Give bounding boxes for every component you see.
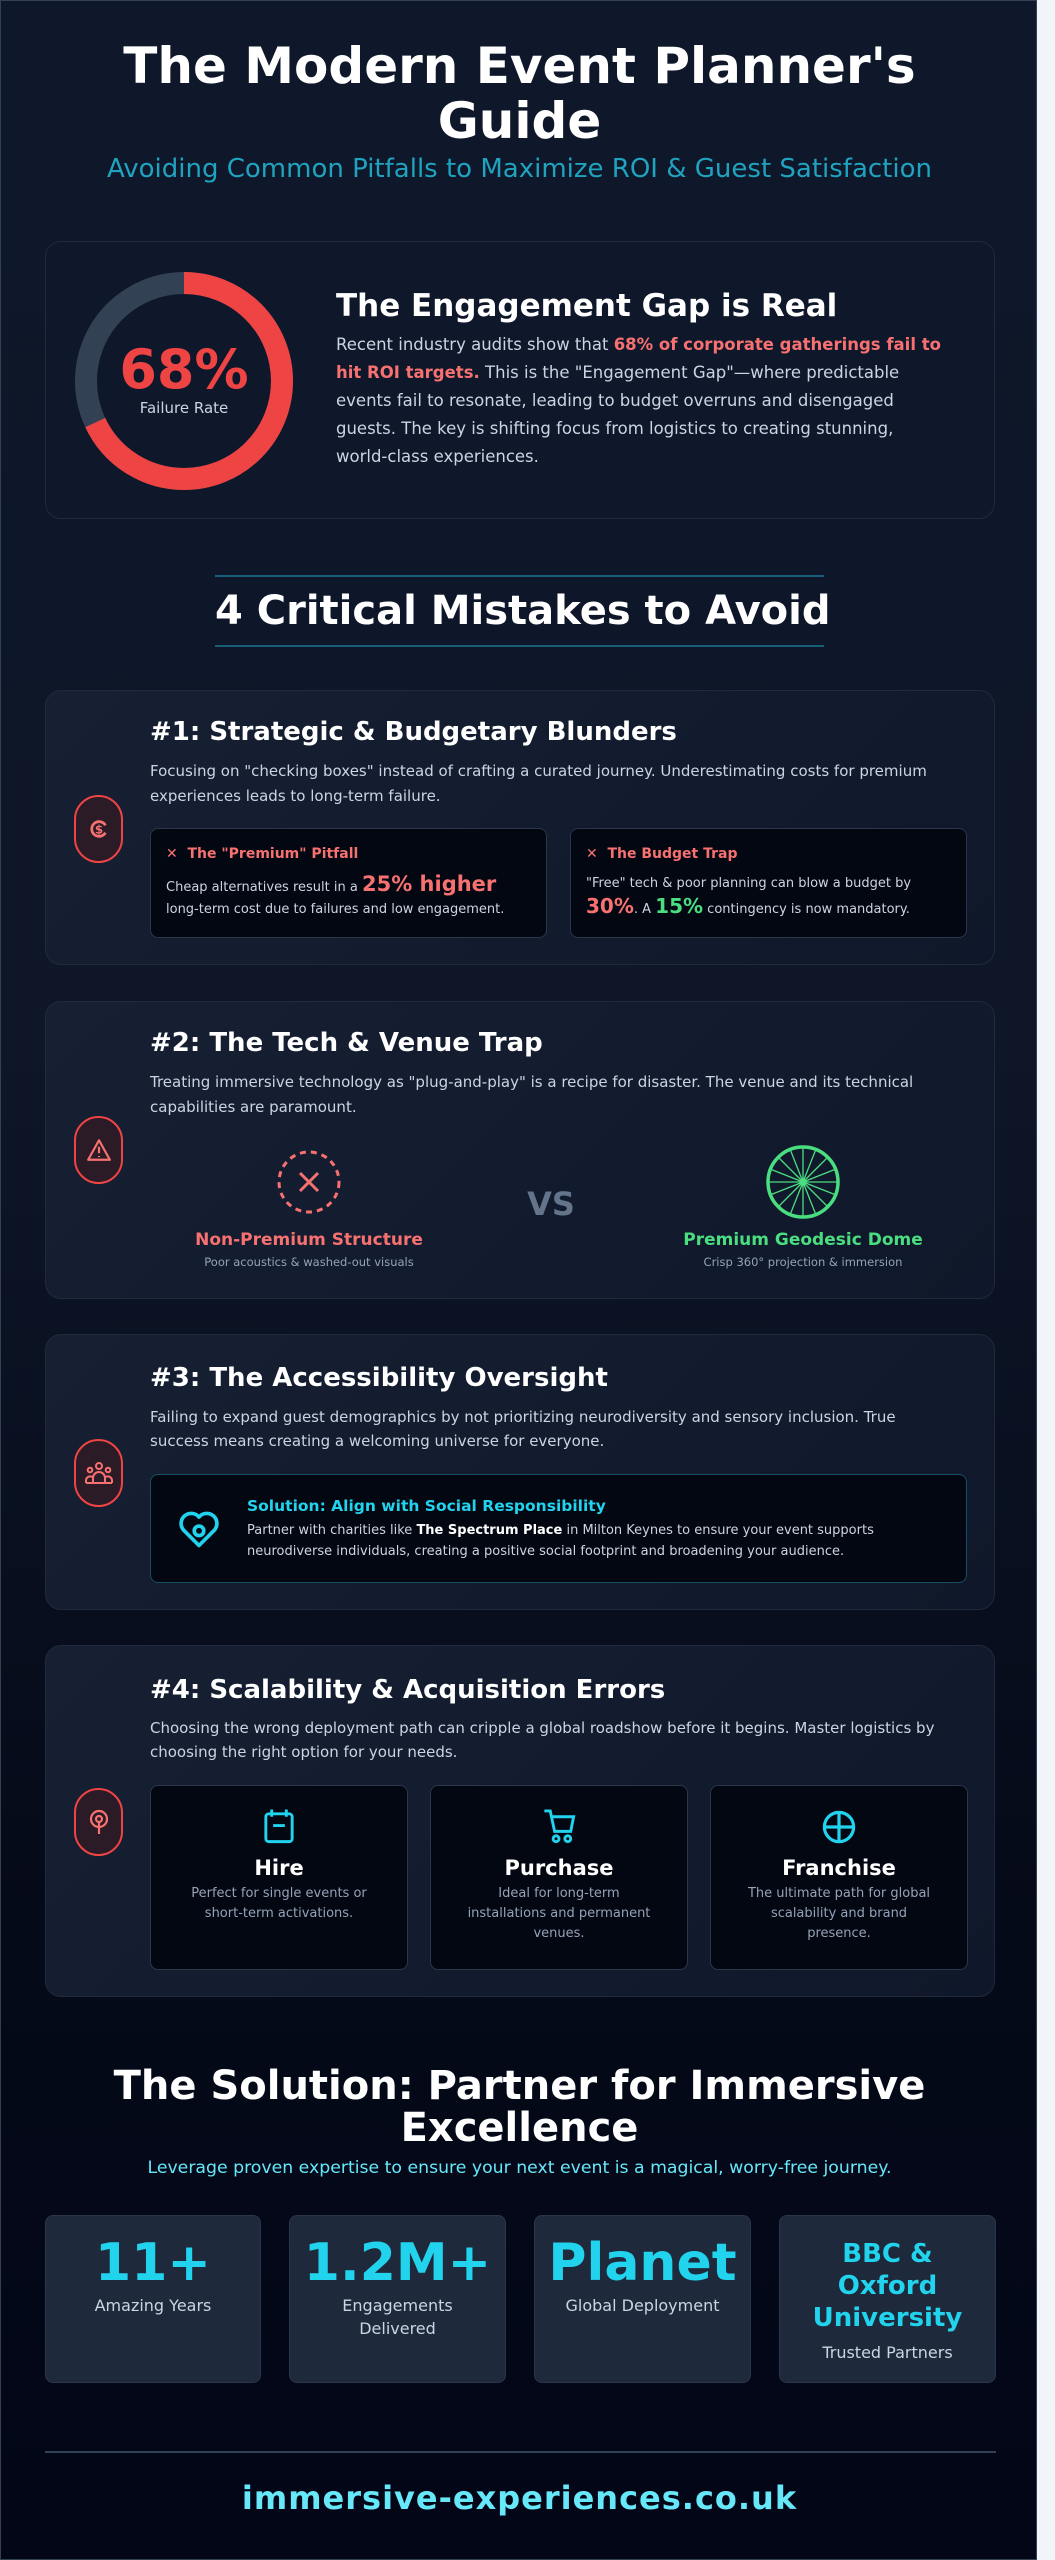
icon: geodesic dome: Premium Geodesic Dome (683, 1230, 923, 1250)
stat: partners: University (813, 2303, 962, 2333)
icon: non-premium structure: Non-Premium Structure (195, 1230, 423, 1250)
option: franchise (710, 1785, 968, 1970)
title: Guide (438, 92, 601, 150)
stat: partners: Oxford (838, 2271, 937, 2301)
callout: premium pitfall (150, 828, 547, 938)
callout: solution: Solution: Align with Social Responsibility (247, 1497, 606, 1515)
callout: budget trap (570, 828, 967, 938)
stat: planet: Planet (548, 2233, 737, 2293)
icon: non-premium structure (195, 1150, 423, 1269)
icon: geodesic dome (683, 1145, 923, 1269)
stat: planet (534, 2215, 751, 2383)
heading: #3: The Accessibility Oversight (150, 1363, 608, 1393)
callout: budget trap: ✕ The Budget Trap (586, 846, 738, 862)
stat: partners: Trusted Partners (822, 2343, 953, 2362)
option: hire (150, 1785, 408, 1970)
option: franchise: Franchise (782, 1856, 896, 1880)
footer url: immersive-experiences.co.uk (242, 2479, 797, 2517)
donut chart: Failure Rate (140, 399, 228, 417)
option: purchase: Purchase (504, 1856, 614, 1880)
title: The Modern Event Planner's (123, 37, 916, 95)
description: Treating immersive technology as "plug-and-play" is a recipe for disaster. The venue and its technical capabilities are paramount. (150, 1073, 913, 1116)
solution subtitle: Leverage proven expertise to ensure your next event is a magical, worry-free journey. (148, 2158, 891, 2178)
section heading (215, 575, 824, 647)
stat: years: 11+ (95, 2233, 211, 2293)
stat: engagements: Engagements (342, 2296, 453, 2315)
icon: location pin (74, 1788, 123, 1856)
donut chart (75, 272, 293, 490)
solution heading: Excellence (401, 2105, 638, 2151)
icon: dollar cycle (74, 795, 123, 863)
stat: engagements: 1.2M+ (304, 2233, 491, 2293)
stat: years (45, 2215, 261, 2383)
stat: engagements (289, 2215, 506, 2383)
section heading: 4 Critical Mistakes to Avoid (215, 588, 831, 634)
description: Failing to expand guest demographics by not prioritizing neurodiversity and sensory inclusion. True success means creating a welcoming universe for everyone. (150, 1408, 896, 1450)
callout: premium pitfall: ✕ The "Premium" Pitfall (166, 846, 358, 862)
paragraph: Recent industry audits show that 68% of corporate gatherings fail to hit ROI targets. This is the "Engagement Gap"—where predictable events fail to resonate, leading to budget overruns and disengaged guests. The key is shifting focus from logistics to creating stunning, world-class experiences. (336, 335, 941, 466)
subtitle: Avoiding Common Pitfalls to Maximize ROI & Guest Satisfaction (107, 154, 932, 184)
panel: mistake 3 (45, 1334, 995, 1610)
description: Choosing the wrong deployment path can cripple a global roadshow before it begins. Master logistics by choosing the right option for your needs. (150, 1719, 934, 1761)
stat: years: Amazing Years (95, 2296, 211, 2315)
donut chart: 68% (119, 338, 249, 401)
icon: warning (74, 1116, 123, 1184)
stat: partners (779, 2215, 996, 2383)
panel: mistake 1 (45, 690, 995, 965)
title (123, 37, 916, 150)
stat: planet: Global Deployment (566, 2296, 720, 2315)
vs label: VS (527, 1185, 575, 1223)
heading: #1: Strategic & Budgetary Blunders (150, 717, 677, 747)
icon: geodesic dome: Crisp 360° projection & immersion (704, 1255, 902, 1269)
heading: #4: Scalability & Acquisition Errors (150, 1675, 665, 1705)
icon: people (74, 1439, 123, 1507)
heading: The Engagement Gap is Real (336, 288, 837, 324)
solution heading (114, 2063, 925, 2151)
panel: engagement gap (45, 241, 995, 519)
stat: engagements: Delivered (359, 2319, 436, 2338)
description: Focusing on "checking boxes" instead of crafting a curated journey. Underestimating costs for premium experiences leads to long-term failure. (150, 762, 927, 805)
option: purchase: Ideal for long-term installations and permanent venues. (468, 1886, 650, 1941)
option: purchase (430, 1785, 688, 1970)
option: hire: Perfect for single events or short-term activations. (191, 1886, 367, 1921)
heading: #2: The Tech & Venue Trap (150, 1028, 543, 1058)
solution heading: The Solution: Partner for Immersive (114, 2063, 925, 2109)
callout: solution (150, 1474, 967, 1583)
panel: mistake 4 (45, 1645, 995, 1997)
callout: solution: Partner with charities like The Spectrum Place in Milton Keynes to ensure your event supports neurodiverse individuals, creating a positive social footprint and broadening your audience. (247, 1523, 874, 1559)
icon: dollar cycle: $ (94, 823, 103, 837)
stat: partners: BBC & (842, 2239, 933, 2269)
callout: budget trap: "Free" tech & poor planning can blow a budget by 30%. A 15% contingency is now mandatory. (586, 876, 911, 918)
icon: non-premium structure: Poor acoustics & washed-out visuals (204, 1255, 414, 1269)
option: franchise: The ultimate path for global scalability and brand presence. (748, 1886, 930, 1941)
option: hire: Hire (254, 1856, 304, 1880)
callout: premium pitfall: Cheap alternatives result in a 25% higher long-term cost due to failures and low engagement. (166, 872, 504, 917)
icon: heart (179, 1512, 219, 1548)
panel: mistake 2 (45, 1001, 995, 1299)
